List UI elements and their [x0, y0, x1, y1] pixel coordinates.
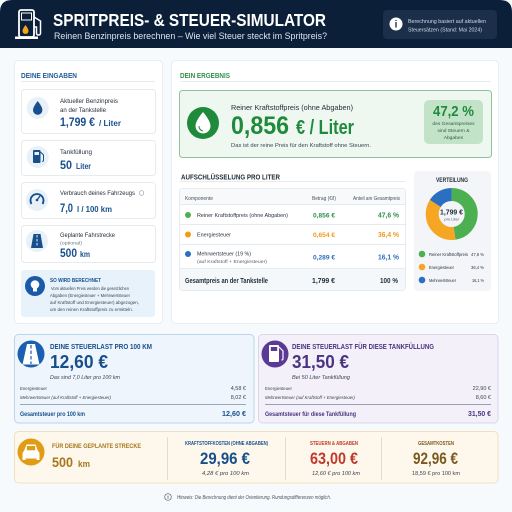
panel: geplante strecke	[14, 432, 498, 483]
callout: so wird berechnet: um den reinen Kraftstoffpreis zu ermitteln.	[50, 307, 133, 312]
legend: Mehrwertsteuer	[429, 278, 456, 284]
column: kraftstoffkosten: 4,28 € pro 100 km	[202, 471, 249, 477]
badge: 47,2 %: Abgaben	[444, 135, 464, 141]
donut chart	[432, 194, 471, 234]
input card: fahrstrecke: 500	[60, 246, 77, 260]
input card: benzinpreis: Aktueller Benzinpreis	[60, 98, 118, 105]
column: steuern und abgaben	[310, 441, 360, 477]
panel: verteilung	[414, 171, 491, 291]
footnote	[165, 494, 331, 501]
input card: fahrstrecke: Geplante Fahrstrecke	[60, 232, 115, 239]
row: gesamtpreis	[185, 276, 398, 285]
panel: steuerlast pro 100 km: Gesamtsteuer pro 100 km	[20, 412, 85, 418]
footnote: Hinweis: Die Berechnung dient der Orientierung. Rundungsdifferenzen möglich.	[177, 495, 331, 501]
result card: reiner kraftstoffpreis: Das ist der reine Preis für den Kraftstoff ohne Steuern.	[231, 143, 371, 149]
input card: benzinpreis: an der Tankstelle	[60, 107, 106, 114]
row: energiesteuer: 36,4 %	[378, 230, 399, 239]
panel: steuerlast tankfüllung: Mehrwertsteuer (auf Kraftstoff + Energiesteuer)	[265, 395, 355, 400]
row: kraftstoffpreis	[185, 210, 399, 220]
info box	[383, 10, 497, 39]
heading: aufschlüsselung: AUFSCHLÜSSELUNG PRO LITER	[181, 172, 280, 182]
row: energiesteuer	[185, 230, 399, 239]
callout: so wird berechnet: auf Kraftstoff und Energiesteuer) abgezogen,	[50, 300, 139, 305]
subtitle: Reinen Benzinpreis berechnen – Wie viel Steuer steckt im Spritpreis?	[54, 31, 327, 42]
icon: purple fuel pump	[262, 340, 288, 368]
heading: deine eingaben: DEINE EINGABEN	[21, 73, 77, 80]
column: gesamtkosten	[412, 441, 460, 477]
header banner	[0, 0, 512, 48]
input card: verbrauch: l / 100 km	[77, 205, 112, 214]
input card: tankfüllung: Liter	[76, 162, 91, 171]
result card: reiner kraftstoffpreis: € / Liter	[296, 117, 354, 139]
panel: steuerlast tankfüllung: DEINE STEUERLAST FÜR DIESE TANKFÜLLUNG	[292, 342, 434, 351]
row: energiesteuer: Energiesteuer	[197, 232, 231, 238]
legend	[419, 251, 485, 284]
route summary: km	[78, 459, 90, 470]
icon: green drop	[187, 107, 219, 139]
row: kraftstoffpreis: Reiner Kraftstoffpreis (ohne Abgaben)	[197, 213, 288, 219]
panel: dein ergebnis	[172, 60, 498, 324]
panel: steuerlast tankfüllung: Gesamtsteuer für diese Tankfüllung	[265, 412, 356, 418]
row: gesamtpreis: 1,799 €	[312, 276, 336, 285]
row: kraftstoffpreis: 47,6 %	[378, 210, 399, 220]
column: steuern und abgaben: 12,60 € pro 100 km	[312, 471, 360, 477]
panel: steuerlast pro 100 km: 12,60 €	[222, 411, 246, 418]
donut chart: pro Liter	[444, 216, 460, 222]
badge: 47,2 %: sind Steuern &	[437, 128, 470, 134]
panel: verteilung: VERTEILUNG	[436, 178, 468, 184]
info box: Berechnung basiert auf aktuellen	[408, 19, 486, 25]
icon: fuel pump	[15, 10, 40, 39]
row: mehrwertsteuer: 16,1 %	[378, 252, 399, 262]
panel: steuerlast pro 100 km: Energiesteuer	[20, 386, 47, 391]
column: steuern und abgaben: STEUERN & ABGABEN	[310, 441, 358, 447]
panel: steuerlast pro 100 km: 12,60 €	[50, 351, 108, 372]
icon: car	[18, 438, 44, 466]
column: steuern und abgaben: 63,00 €	[310, 450, 358, 468]
row: gesamtpreis: Gesamtpreis an der Tankstelle	[185, 278, 268, 285]
row: gesamtpreis: 100 %	[380, 276, 398, 285]
table: aufschlüsselung pro liter: Betrag (€/l)	[312, 196, 336, 202]
row: energiesteuer: 0,654 €	[313, 232, 335, 239]
result card: reiner kraftstoffpreis: Reiner Kraftstoffpreis (ohne Abgaben)	[231, 103, 353, 112]
input card: tankfüllung: 50	[60, 158, 72, 172]
info box: i	[395, 20, 398, 30]
table: aufschlüsselung pro liter: Komponente	[185, 196, 213, 202]
callout: so wird berechnet	[21, 270, 155, 317]
legend: Reiner Kraftstoffpreis	[429, 252, 469, 258]
panel: deine eingaben	[14, 60, 162, 324]
callout: so wird berechnet: SO WIRD BERECHNET	[50, 278, 102, 284]
input card: benzinpreis: 1,799 €	[60, 115, 95, 129]
panel: steuerlast tankfüllung: Bei 50 Liter Tankfüllung	[292, 375, 351, 381]
input card: fahrstrecke: (optional)	[60, 240, 82, 246]
row: mehrwertsteuer: Mehrwertsteuer (19 %)	[197, 252, 251, 258]
heading: dein ergebnis: DEIN ERGEBNIS	[180, 73, 230, 80]
input card: benzinpreis	[22, 90, 156, 134]
row: kraftstoffpreis: 0,856 €	[313, 212, 335, 220]
panel: steuerlast tankfüllung: Energiesteuer	[265, 386, 292, 391]
icon: road	[18, 340, 44, 368]
badge: 47,2 %: 47,2 %	[433, 104, 474, 120]
callout: so wird berechnet: Abgaben (Energiesteuer + Mehrwertsteuer	[50, 293, 130, 298]
panel: steuerlast pro 100 km: 4,58 €	[231, 386, 246, 392]
input card: verbrauch: 7,0	[60, 201, 73, 215]
row: mehrwertsteuer	[185, 251, 399, 265]
column: gesamtkosten: 18,59 € pro 100 km	[412, 471, 460, 477]
legend: 36,4 %	[471, 265, 485, 271]
result card: reiner kraftstoffpreis	[180, 90, 492, 158]
info box: Steuersätzen (Stand: Mai 2024)	[408, 28, 482, 34]
panel: steuerlast pro 100 km: Mehrwertsteuer (auf Kraftstoff + Energiesteuer)	[20, 395, 111, 400]
column: gesamtkosten: 92,96 €	[413, 450, 458, 468]
input card: tankfüllung	[22, 140, 156, 176]
badge: 47,2 %: des Gesamtpreises	[432, 121, 475, 127]
panel: steuerlast tankfüllung: 31,50 €	[292, 351, 349, 372]
legend: 47,6 %	[471, 252, 485, 258]
panel: steuerlast tankfüllung: 31,50 €	[468, 411, 491, 418]
input card: tankfüllung: Tankfüllung	[60, 149, 92, 156]
column: kraftstoffkosten: KRAFTSTOFFKOSTEN (OHNE ABGABEN)	[185, 441, 268, 447]
input card: verbrauch	[22, 182, 156, 218]
icon: light bulb	[25, 276, 45, 296]
input card: fahrstrecke: km	[80, 250, 90, 259]
input card: verbrauch: Verbrauch deines Fahrzeugs	[60, 190, 135, 197]
panel: steuerlast pro 100 km: DEINE STEUERLAST PRO 100 KM	[50, 344, 152, 351]
column: kraftstoffkosten	[185, 441, 268, 477]
route summary: FÜR DEINE GEPLANTE STRECKE	[52, 441, 142, 450]
column: kraftstoffkosten: 29,96 €	[200, 450, 250, 468]
title: SPRITPREIS- & STEUER-SIMULATOR	[53, 10, 326, 30]
table: aufschlüsselung pro liter: Anteil am Gesamtpreis	[353, 196, 400, 202]
callout: so wird berechnet: Vom aktuellen Preis werden die gesetzlichen	[51, 286, 129, 291]
result card: reiner kraftstoffpreis: 0,856	[231, 112, 289, 140]
route summary: 500	[52, 455, 73, 470]
panel: steuerlast pro 100 km	[14, 334, 254, 423]
legend: Energiesteuer	[429, 265, 454, 271]
input card: benzinpreis: / Liter	[99, 119, 121, 128]
row: mehrwertsteuer: 0,289 €	[313, 254, 335, 262]
panel: steuerlast tankfüllung: 22,90 €	[473, 386, 491, 392]
legend: 16,1 %	[472, 278, 485, 284]
panel: steuerlast pro 100 km: 8,02 €	[231, 395, 246, 401]
route summary	[52, 441, 142, 470]
donut chart: 1,799 €	[440, 210, 463, 216]
table: aufschlüsselung pro liter	[180, 188, 406, 290]
row: mehrwertsteuer: (auf Kraftstoff + Energiesteuer)	[197, 259, 267, 265]
panel: steuerlast pro 100 km: Das sind 7,0 Liter pro 100 km	[50, 375, 120, 381]
panel: steuerlast tankfüllung: 8,60 €	[476, 395, 491, 401]
panel: steuerlast tankfüllung	[258, 334, 498, 423]
column: gesamtkosten: GESAMTKOSTEN	[418, 441, 454, 447]
badge: 47,2 %	[424, 100, 483, 144]
input card: fahrstrecke	[22, 226, 156, 262]
